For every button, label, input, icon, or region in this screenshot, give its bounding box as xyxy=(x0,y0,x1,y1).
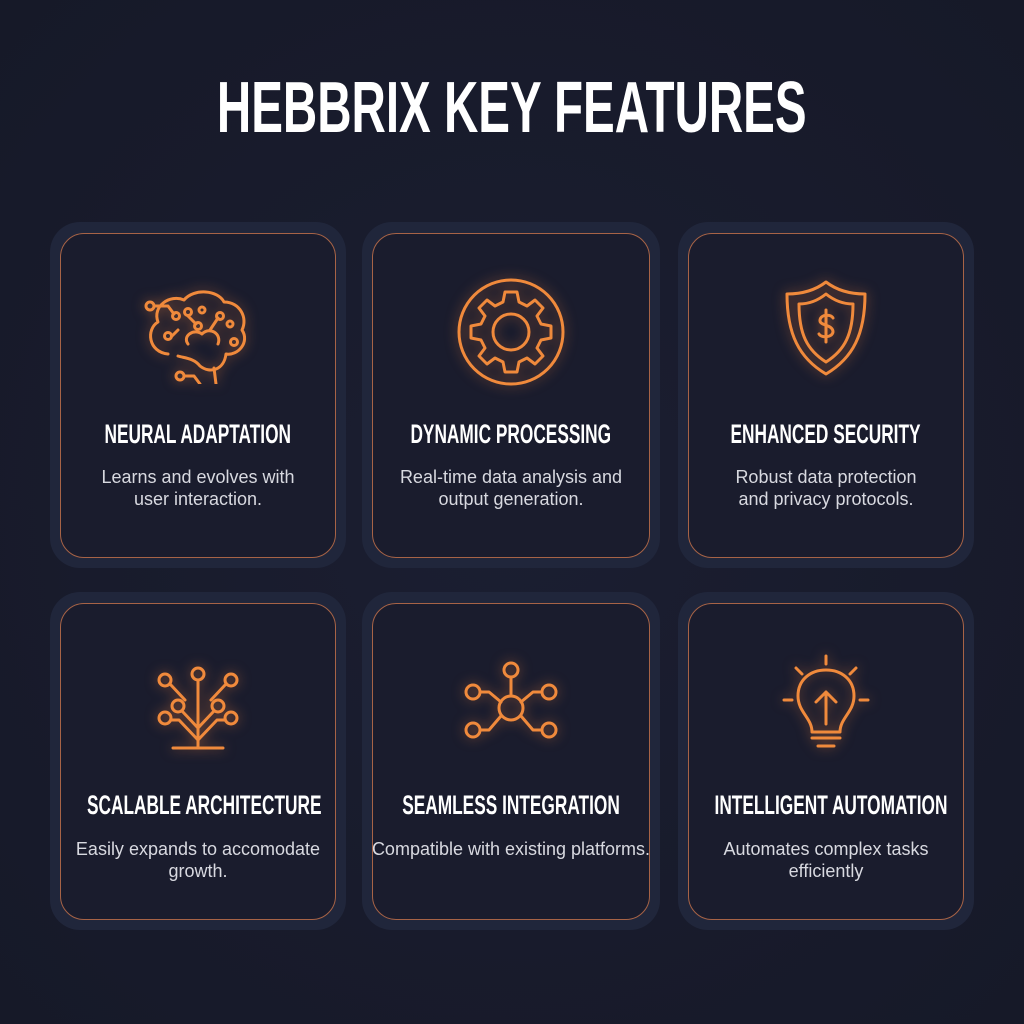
heading: DYNAMIC PROCESSING xyxy=(411,419,611,449)
description xyxy=(76,839,320,881)
description xyxy=(735,467,917,509)
panel: scalable architecture xyxy=(50,592,346,930)
icon: tree xyxy=(152,661,244,756)
description xyxy=(723,839,929,881)
description: Automates complex tasks xyxy=(723,839,929,859)
description: output generation. xyxy=(438,489,584,509)
description xyxy=(400,467,622,509)
description: user interaction. xyxy=(134,489,262,509)
description: and privacy protocols. xyxy=(738,489,914,509)
icon: network xyxy=(459,656,563,744)
panel: dynamic processing xyxy=(362,222,660,568)
icon: shield xyxy=(779,276,873,380)
heading: INTELLIGENT AUTOMATION xyxy=(715,790,947,820)
panel: neural adaptation xyxy=(50,222,346,568)
panel: intelligent automation xyxy=(678,592,974,930)
heading: ENHANCED SECURITY xyxy=(731,419,921,449)
description: Robust data protection xyxy=(735,467,917,487)
panel: seamless integration xyxy=(362,592,660,930)
icon: brain xyxy=(140,284,252,387)
description: growth. xyxy=(168,861,228,881)
icon: gear xyxy=(451,272,571,392)
description: Compatible with existing platforms. xyxy=(372,839,650,859)
description: efficiently xyxy=(789,861,863,881)
title: HEBBRIX KEY FEATURES xyxy=(217,68,807,148)
description: Learns and evolves with xyxy=(101,467,295,487)
panel: enhanced security xyxy=(678,222,974,568)
description: Easily expands to accomodate xyxy=(76,839,320,859)
description: Real-time data analysis and xyxy=(400,467,622,487)
heading: SCALABLE ARCHITECTURE xyxy=(87,790,322,820)
heading: NEURAL ADAPTATION xyxy=(105,419,291,449)
heading: SEAMLESS INTEGRATION xyxy=(402,790,620,820)
icon: lightbulb xyxy=(782,654,870,754)
description xyxy=(101,467,295,509)
